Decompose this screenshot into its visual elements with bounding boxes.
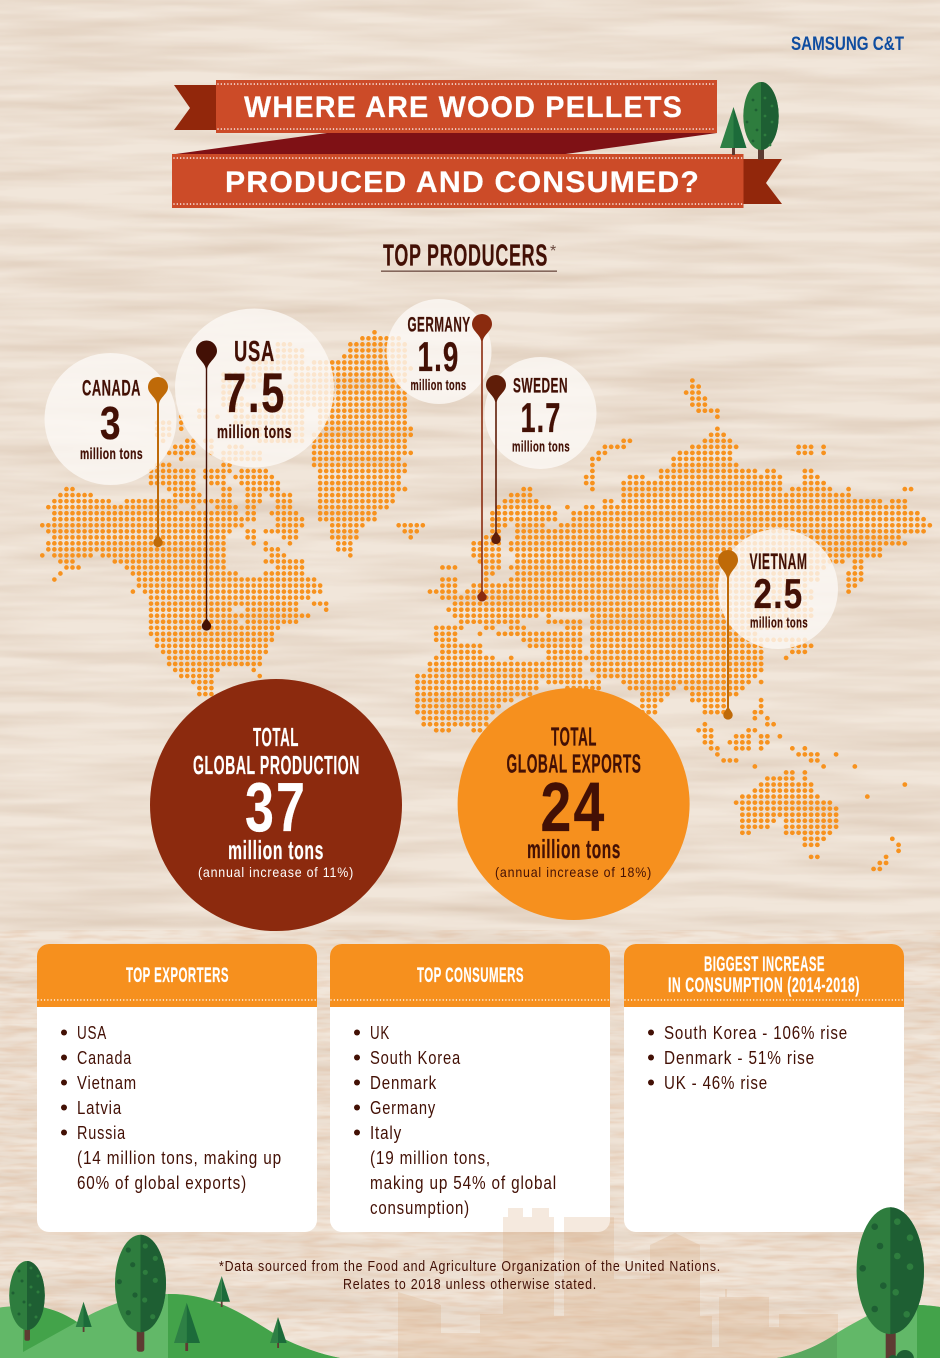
list: biggest increases: South Korea - 106% rise <box>664 1023 848 1043</box>
bubble: Canada: million tons <box>80 446 143 463</box>
bubble: Canada: CANADA <box>82 376 141 400</box>
ribbon fold <box>172 133 717 154</box>
title ribbon <box>172 80 782 208</box>
panel: top consumers <box>330 944 610 1232</box>
pin: Vietnam <box>718 550 738 720</box>
list: exporters: 60% of global exports) <box>77 1173 247 1193</box>
panel header: top consumers: TOP CONSUMERS <box>417 964 524 987</box>
bubble: Canada <box>44 353 176 485</box>
pin: USA <box>196 341 217 631</box>
panel header: top consumers <box>330 944 610 1007</box>
icon: trees beside title <box>720 82 779 160</box>
bubble: Germany: 1.9 <box>418 333 460 380</box>
list: exporters <box>61 1023 282 1193</box>
list: consumers: consumption) <box>370 1198 470 1218</box>
hills left <box>0 1294 340 1358</box>
heading: top producers: TOP PRODUCERS <box>383 238 548 272</box>
list: exporters: Canada <box>77 1048 132 1068</box>
ribbon top band: WHERE ARE WOOD PELLETS <box>244 91 683 124</box>
list: consumers: Denmark <box>370 1073 437 1093</box>
list: consumers: making up 54% of global <box>370 1173 557 1193</box>
circle: total global production: million tons <box>228 835 324 865</box>
footnote: *Data sourced from the Food and Agriculture Organization of the United Nations. <box>219 1259 721 1275</box>
hill right <box>777 1305 940 1358</box>
circle: total global exports: million tons <box>527 834 621 864</box>
tree: large left <box>115 1235 166 1352</box>
circle: total global exports: (annual increase of 18%) <box>495 864 652 880</box>
panel: top exporters <box>37 944 317 1232</box>
ribbon bottom band: PRODUCED AND CONSUMED? <box>225 166 700 199</box>
tree: small left <box>9 1261 45 1341</box>
circle: total global exports: 24 <box>540 768 606 846</box>
list: consumers: Germany <box>370 1098 436 1118</box>
panel header: top exporters <box>37 944 317 1007</box>
panel header: top exporters: TOP EXPORTERS <box>126 964 229 987</box>
list: exporters: Latvia <box>77 1098 122 1118</box>
bubble: Vietnam: million tons <box>750 614 808 632</box>
list: consumers: South Korea <box>370 1048 461 1068</box>
pin: Germany <box>472 314 492 602</box>
map: europe, africa, asia, oceania <box>405 381 930 869</box>
bubble: USA: USA <box>234 336 275 368</box>
bubble: USA: million tons <box>217 421 292 442</box>
circle: total global exports: TOTAL <box>551 722 597 752</box>
list: exporters: (14 million tons, making up <box>77 1148 282 1168</box>
circle: total global production <box>150 679 402 931</box>
circle: total global production: 37 <box>245 768 307 846</box>
bubble: Canada: 3 <box>100 397 122 449</box>
bubble: USA: 7.5 <box>223 361 286 424</box>
panel header: biggest increase: BIGGEST INCREASE <box>704 953 825 976</box>
tree: pines <box>76 1276 287 1351</box>
circle: total global production: TOTAL <box>253 722 299 752</box>
tree: large right <box>857 1207 924 1358</box>
bubble: Sweden <box>484 357 596 469</box>
bubble: Vietnam: VIETNAM <box>750 549 808 574</box>
bubble: Vietnam: 2.5 <box>754 570 804 617</box>
circle: total global exports <box>458 688 690 920</box>
bubble: Sweden: million tons <box>512 438 570 456</box>
bubble: Germany: GERMANY <box>408 314 470 336</box>
bush bottom right <box>888 1350 914 1358</box>
bubble: Sweden: SWEDEN <box>513 374 568 398</box>
circle: total global production: GLOBAL PRODUCTION <box>193 750 360 780</box>
world dot map <box>42 332 930 869</box>
bubble: Germany: million tons <box>410 377 466 394</box>
heading: top producers <box>381 238 557 272</box>
bubble: Sweden: 1.7 <box>520 394 562 441</box>
list: consumers: (19 million tons, <box>370 1148 491 1168</box>
pin: Canada <box>148 377 168 547</box>
circle: total global production: (annual increase of 11%) <box>198 864 354 880</box>
ribbon top band <box>216 80 717 133</box>
circle: total global exports: GLOBAL EXPORTS <box>506 748 642 778</box>
list: biggest increases: Denmark - 51% rise <box>664 1048 815 1068</box>
logo: Samsung C&T: SAMSUNG C&T <box>791 34 904 55</box>
ribbon bottom band <box>172 154 744 208</box>
ribbon right tail <box>743 159 782 204</box>
bubble: USA <box>175 308 334 468</box>
list: biggest increases <box>648 1023 848 1093</box>
panel header: biggest increase <box>624 944 904 1007</box>
pin: Sweden <box>486 375 506 544</box>
list: consumers: Italy <box>370 1123 402 1143</box>
list: exporters: Russia <box>77 1123 126 1143</box>
list: consumers <box>354 1023 557 1218</box>
footnote: Relates to 2018 unless otherwise stated. <box>343 1277 597 1293</box>
list: biggest increases: UK - 46% rise <box>664 1073 768 1093</box>
footnote <box>219 1259 721 1293</box>
heading: top producers: * <box>550 243 556 260</box>
list: exporters: USA <box>77 1023 107 1043</box>
list: consumers: UK <box>370 1023 390 1043</box>
bubble: Vietnam <box>718 529 838 649</box>
ribbon left tail <box>174 85 216 130</box>
bubble: Germany <box>386 299 492 404</box>
panel: biggest increase in consumption <box>624 944 904 1232</box>
city silhouette <box>398 1208 838 1358</box>
list: exporters: Vietnam <box>77 1073 137 1093</box>
map: americas and greenland <box>42 332 423 694</box>
